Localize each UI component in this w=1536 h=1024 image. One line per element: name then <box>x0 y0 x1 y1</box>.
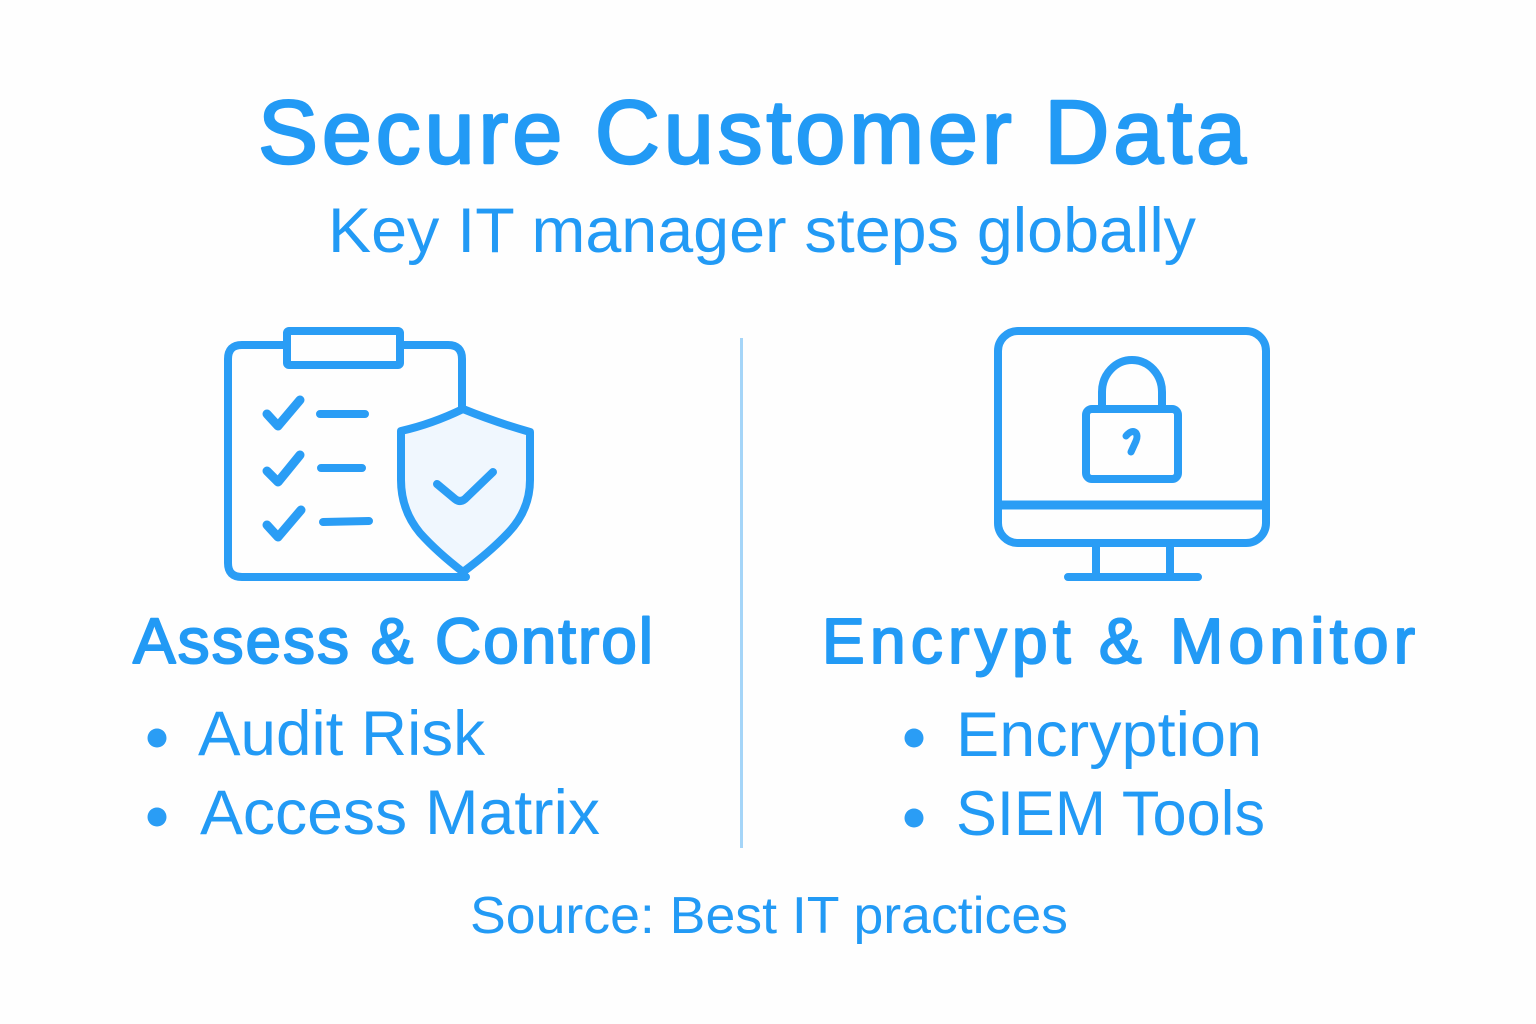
title: Secure Customer Data <box>258 83 1247 183</box>
monitor screen <box>998 331 1266 543</box>
shield check <box>437 472 493 501</box>
item: Encryption: Encryption <box>956 700 1262 770</box>
shield <box>401 409 530 572</box>
bullet <box>148 808 166 826</box>
list: Assess & Control items <box>148 699 600 848</box>
clipboard body <box>228 345 466 577</box>
monitor stand <box>1068 545 1198 577</box>
list: Encrypt & Monitor items <box>904 700 1265 849</box>
heading: Encrypt & Monitor: Encrypt & Monitor <box>822 605 1415 677</box>
padlock shackle <box>1102 360 1162 408</box>
heading: Assess & Control: Assess & Control <box>133 605 653 677</box>
item: Access Matrix: Access Matrix <box>200 778 600 848</box>
monitor bezel line <box>998 500 1266 510</box>
padlock body <box>1086 409 1178 479</box>
checklist lines <box>320 414 369 522</box>
item: Audit Risk: Audit Risk <box>198 699 486 769</box>
item: SIEM Tools: SIEM Tools <box>956 779 1265 849</box>
padlock keyhole <box>1126 432 1137 452</box>
clipboard clip <box>287 331 400 365</box>
icon: monitor with padlock <box>998 331 1266 577</box>
subtitle: Key IT manager steps globally <box>328 196 1197 266</box>
source note: Source: Best IT practices <box>470 887 1068 945</box>
bullet <box>904 728 924 748</box>
bullet <box>148 728 166 748</box>
bullet <box>904 808 924 828</box>
divider <box>740 338 743 848</box>
checklist marks <box>267 400 301 537</box>
icon: clipboard with shield <box>228 331 530 577</box>
